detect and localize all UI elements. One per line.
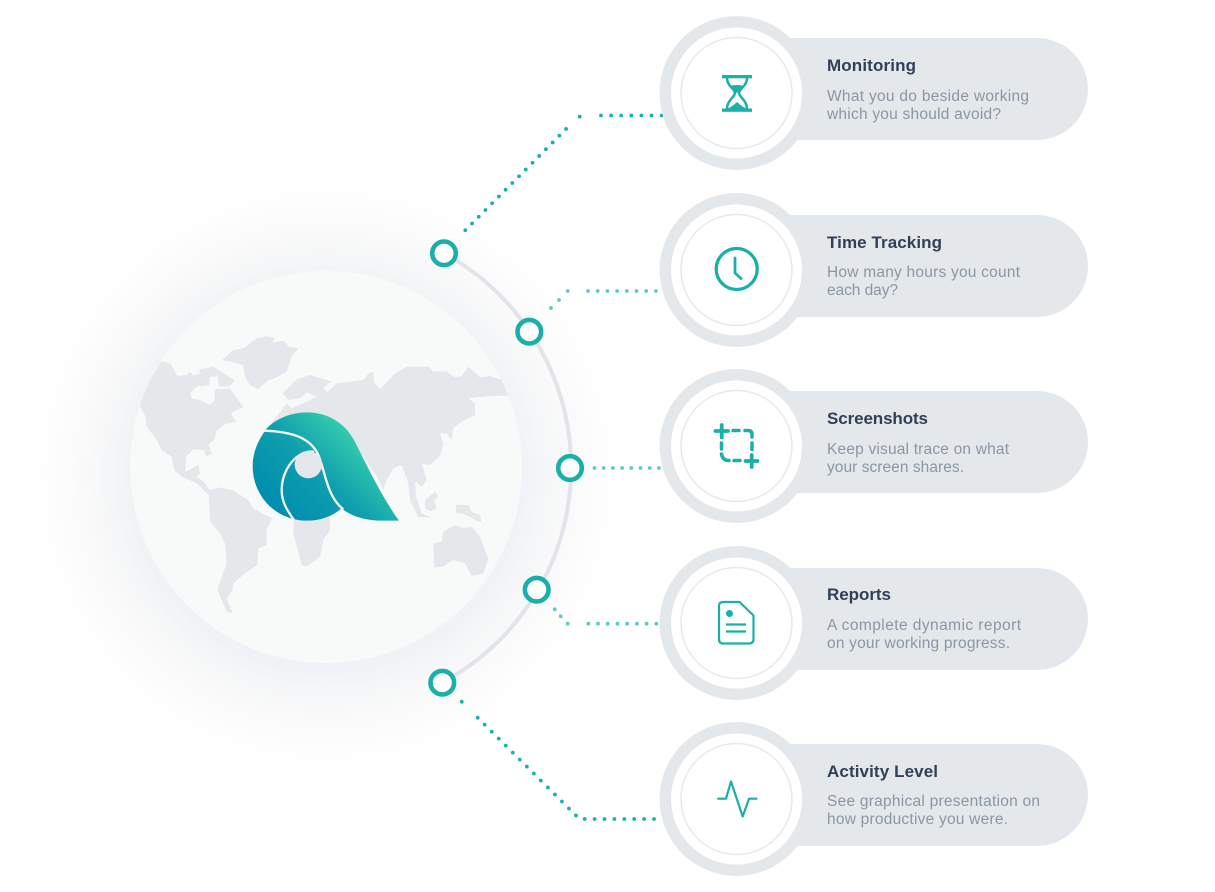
icon: hourglass (722, 75, 752, 112)
heading: Time Tracking: Time Tracking (827, 233, 942, 252)
icon: activity pulse (717, 782, 757, 816)
map: Americas (139, 361, 272, 613)
text: Monitoring description: What you do beside working (827, 88, 1029, 105)
text: Activity Level description (827, 793, 1040, 828)
panel: Monitoring (660, 16, 1088, 170)
map: Eurasia (267, 367, 508, 517)
map: Hudson Bay (190, 377, 231, 405)
logo eye (295, 451, 322, 478)
icon: report document (719, 602, 754, 644)
logo white curve: inner (282, 451, 314, 520)
logo body (253, 412, 399, 521)
text: Time Tracking description: each day? (827, 282, 898, 299)
heading: Monitoring: Monitoring (827, 56, 916, 75)
globe circle (130, 271, 522, 663)
icon: clock (716, 248, 757, 290)
panel: Time Tracking (660, 193, 1088, 347)
text: Screenshots description: Keep visual trace on what (827, 441, 1010, 458)
text: Activity Level description: how productive you were. (827, 811, 1008, 828)
connector arc (442, 253, 571, 683)
dotted connector 3 (594, 466, 660, 470)
icon: crop frame (716, 425, 758, 467)
text: Screenshots description: your screen shares. (827, 459, 964, 476)
logo (253, 412, 399, 521)
panel: Activity Level (660, 722, 1088, 876)
heading: Activity Level: Activity Level (827, 762, 938, 781)
dotted connector 1 (465, 116, 663, 230)
text: Time Tracking description (827, 264, 1021, 299)
map: Africa (293, 517, 330, 567)
heading: Screenshots: Screenshots (827, 409, 928, 428)
dotted connector 5 (462, 702, 655, 819)
map: Borneo and islands (425, 492, 438, 511)
map: Greenland (222, 336, 298, 389)
text: Screenshots description (827, 441, 1010, 476)
map: Australia (433, 525, 488, 576)
logo white curve: outer (264, 431, 343, 509)
text: Reports description: A complete dynamic report (827, 617, 1022, 634)
heading: Reports: Reports (827, 585, 891, 604)
connector nodes (430, 242, 582, 694)
text: Monitoring description: which you should avoid? (826, 106, 1001, 123)
dotted connector 2 (551, 291, 657, 308)
text: Activity Level description: See graphical presentation on (827, 793, 1040, 810)
background glow (26, 175, 626, 775)
panel: Screenshots (660, 369, 1088, 523)
text: Time Tracking description: How many hours you count (827, 264, 1021, 281)
panel: Reports (660, 546, 1088, 700)
text: Reports description (827, 617, 1022, 652)
text: Monitoring description (826, 88, 1029, 123)
text: Reports description: on your working progress. (827, 635, 1010, 652)
dotted connector 4 (555, 609, 657, 624)
map: New Guinea (456, 505, 482, 523)
world map (139, 336, 508, 613)
